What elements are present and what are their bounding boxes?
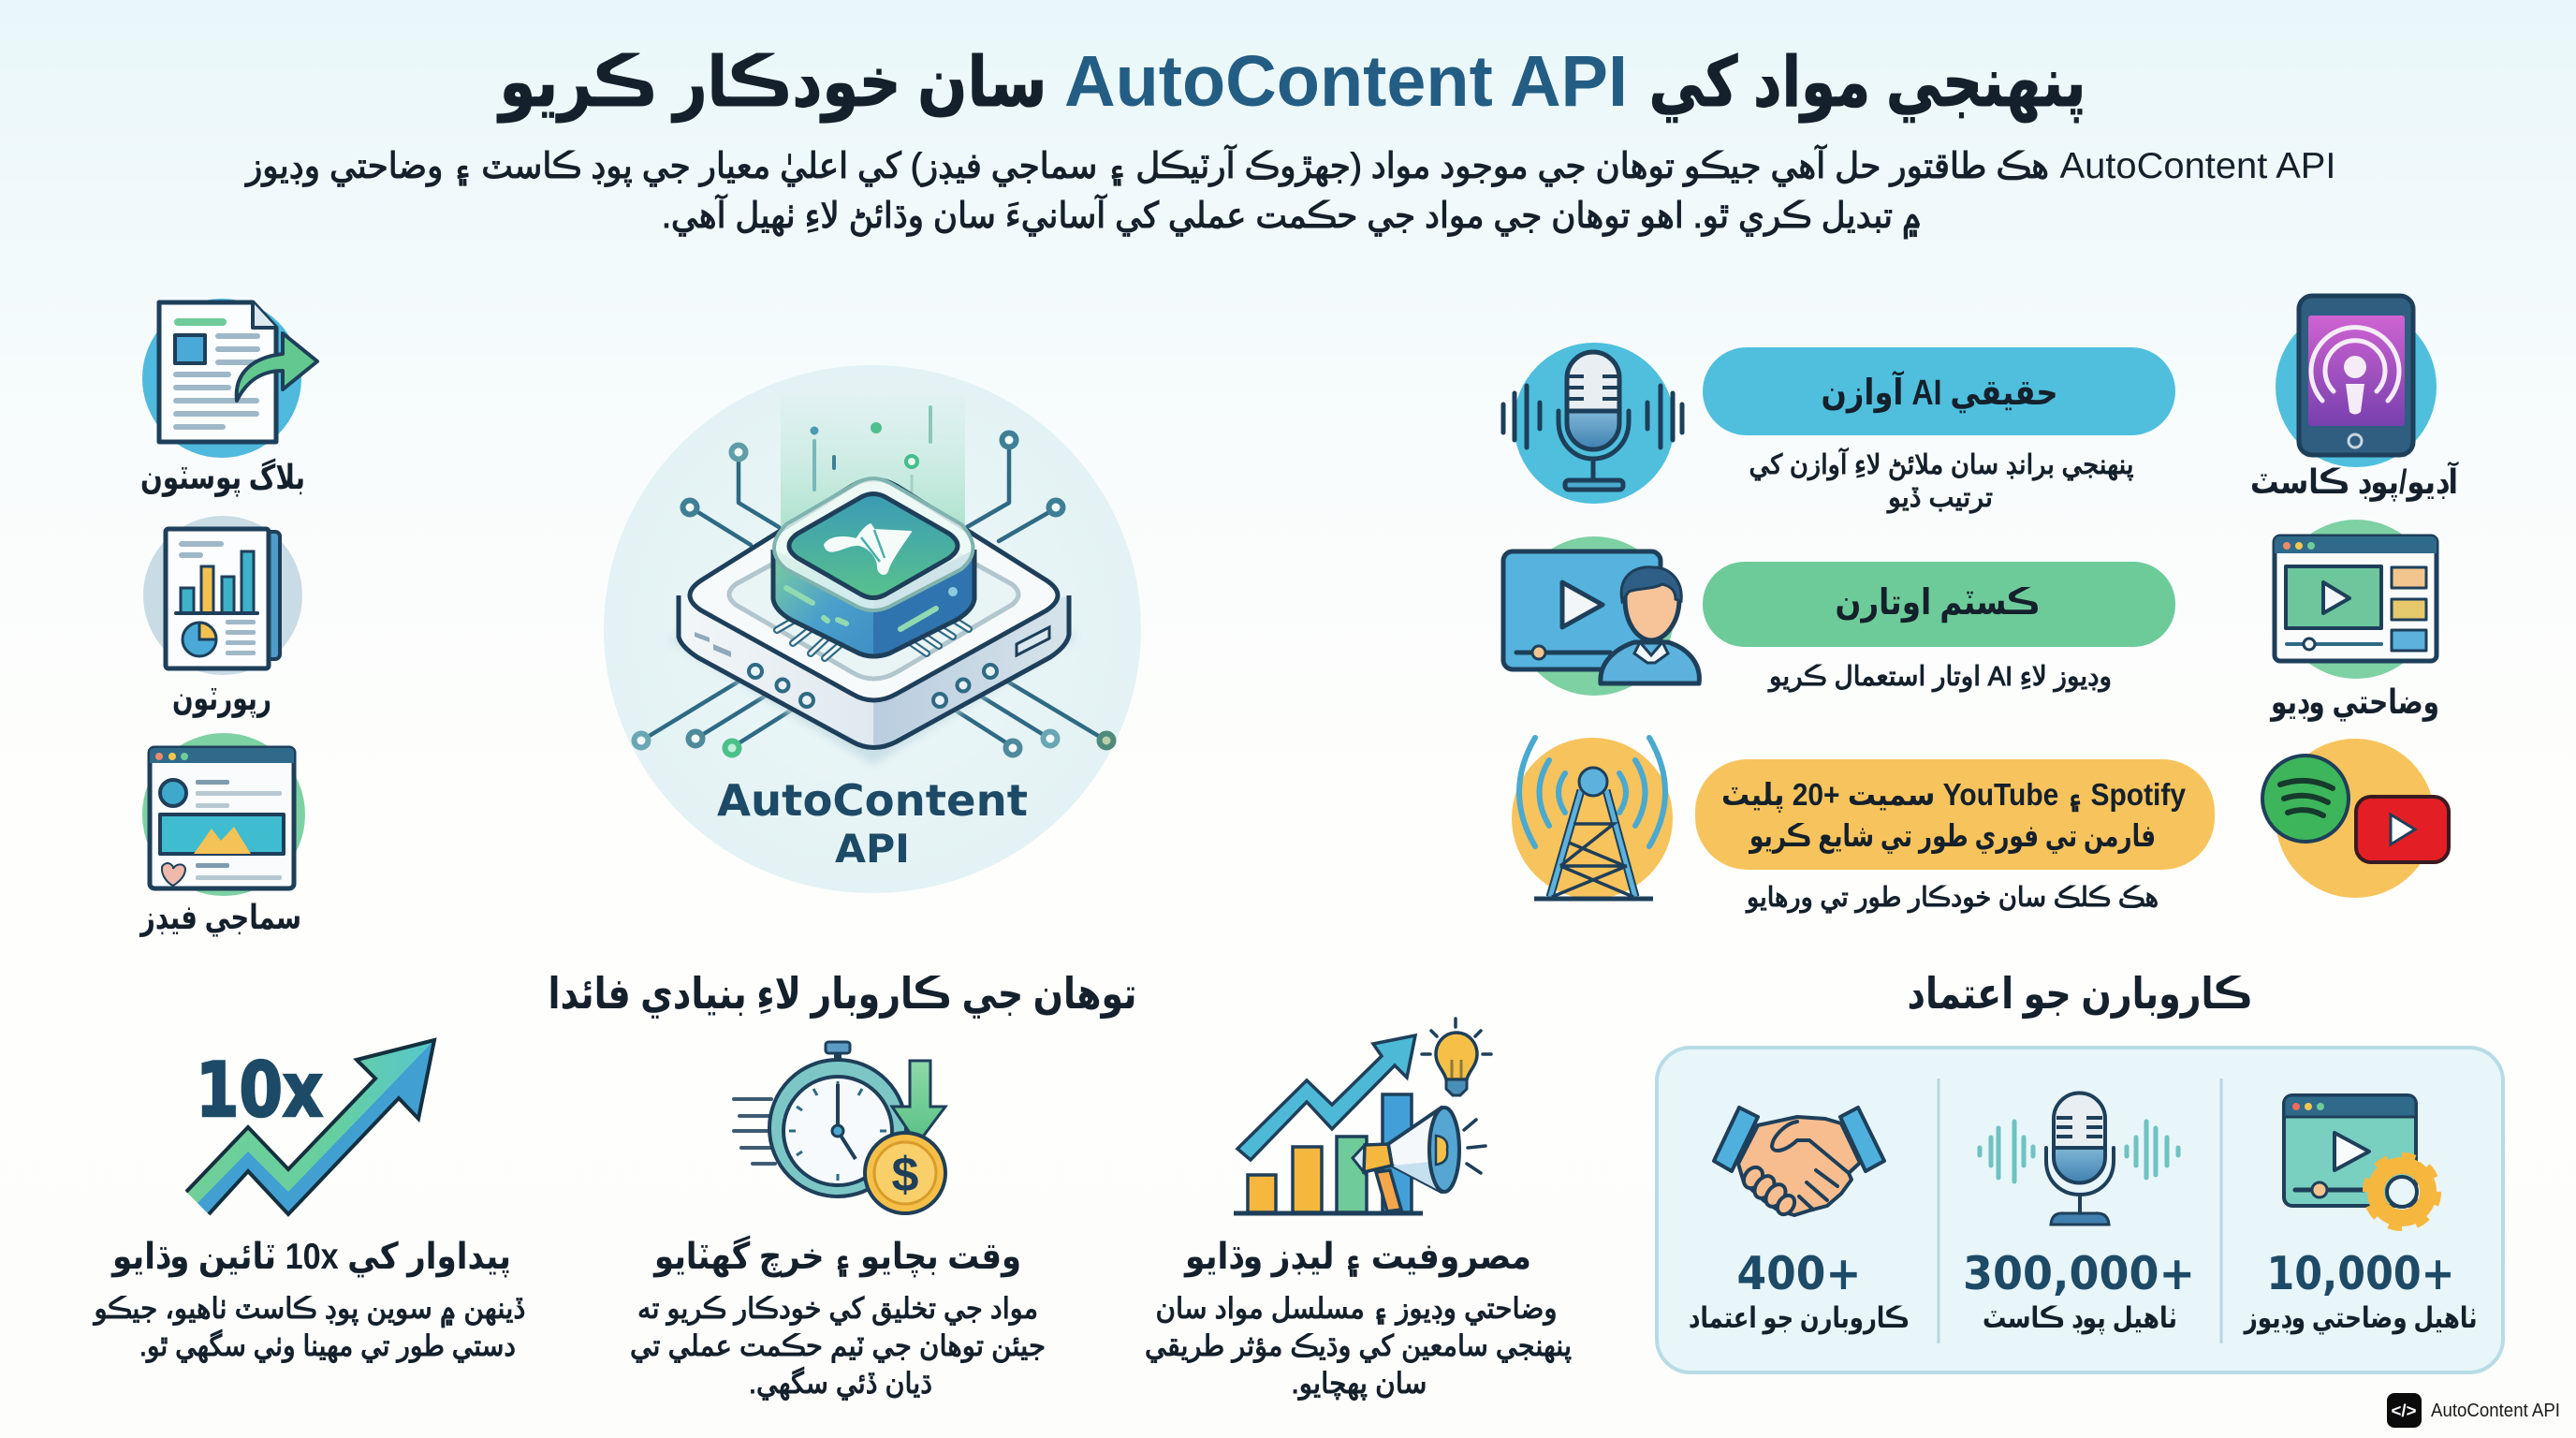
title: AutoContent API: [1064, 41, 1628, 122]
icon: microphone in blue circle: [1503, 343, 1682, 504]
benefit description: [93, 1292, 526, 1363]
text: voices description: پنهنجي برانڊ سان ملائڻ لاءِ آوازن کي: [1749, 448, 2134, 481]
benefit heading: وقت بچايو ۽ خرچ گهٽايو: [652, 1235, 1021, 1278]
brand badge: </>: [2391, 1401, 2417, 1420]
panel: benefit save time: [630, 1042, 1046, 1401]
panel: features: [1503, 343, 2215, 914]
light beam: [781, 396, 965, 532]
panel: outputs: [2250, 296, 2459, 898]
icon: explainer video: [2275, 520, 2437, 679]
pill: realistic AI voices: حقيقي AI آوازن: [1822, 370, 2057, 414]
stat labels: ٺاهيل پوڊ ڪاسٽ: [1983, 1301, 2177, 1335]
benefit heading: پيداوار کي 10x ٽائين وڌايو: [110, 1237, 511, 1278]
panel: central API hub: [604, 365, 1141, 893]
label: explainer video: وضاحتي وڊيو: [2269, 682, 2439, 722]
title: [496, 41, 2086, 124]
benefit heading: مصروفيت ۽ ليڊز وڌايو: [1183, 1237, 1531, 1278]
stat numbers: 400+: [1737, 1247, 1861, 1300]
pill: custom avatars: [1703, 562, 2175, 647]
icon: video with gear: [2284, 1095, 2437, 1226]
stat labels: ٺاهيل وضاحتي وڊيوز: [2243, 1301, 2477, 1335]
text: avatars description: وڊيوز لاءِ AI اوتار استعمال ڪريو: [1767, 662, 2112, 692]
label: audio podcast: آڊيو/پوڊ ڪاسٽ: [2250, 461, 2459, 502]
benefit description: مواد جي تخليق کي خودڪار ڪريو ته: [637, 1292, 1038, 1326]
benefit description: پنهنجي سامعين کي وڌيڪ مؤثر طريقي: [1145, 1329, 1572, 1363]
subtitle: [244, 144, 2335, 239]
stat labels: [1689, 1301, 2477, 1335]
benefit description: جيئن توهان جي ٽيم حڪمت عملي تي: [630, 1329, 1046, 1363]
connector nodes: [635, 433, 1114, 755]
icon: 10x growth arrow: [186, 1040, 434, 1214]
subtitle: ۾ تبديل ڪري ٿو. اهو توهان جي مواد جي حڪمت عملي کي آسانيءَ سان وڌائڻ لاءِ ٺهيل آهي.: [662, 194, 1922, 239]
icon: blog posts: [142, 299, 317, 458]
label: blog posts: بلاگ پوسٽون: [140, 457, 305, 497]
benefit description: سان پهچايو.: [1292, 1367, 1427, 1401]
stat labels: ڪاروبارن جو اعتماد: [1689, 1301, 1910, 1335]
benefit description: وضاحتي وڊيوز ۽ مسلسل مواد سان: [1155, 1292, 1558, 1326]
panel: input sources: [139, 299, 317, 937]
pill: custom avatars: ڪسٽم اوتارن: [1835, 583, 2041, 624]
benefit description: ڏينهن ۾ سوين پوڊ ڪاسٽ ٺاهيو، جيڪو: [93, 1292, 526, 1328]
icon: bars megaphone and bulb: [1234, 1019, 1491, 1213]
benefit description: [630, 1292, 1046, 1401]
icon: video with avatar: [1503, 536, 1699, 696]
icon: 10x growth arrow: 10x: [196, 1047, 323, 1134]
particles: [811, 407, 930, 496]
icon: social feeds: [142, 733, 305, 896]
panel: benefit engagement: [1145, 1019, 1572, 1401]
title: سان خودڪار ڪريو: [496, 43, 1046, 124]
icon: podcast app: [2276, 296, 2437, 467]
chip logo: [825, 524, 911, 574]
hub label: API: [835, 826, 910, 872]
stat numbers: 300,000+: [1963, 1247, 2195, 1300]
text: voices description: ترتيب ڏيو: [1886, 483, 1993, 513]
hub label: AutoContent: [717, 775, 1028, 826]
icon: stopwatch with coin: [734, 1042, 945, 1213]
heading: business trust: ڪاروبارن جو اعتماد: [1908, 969, 2252, 1019]
device base: [669, 479, 1078, 765]
icon: handshake: [1714, 1108, 1884, 1218]
subtitle: AutoContent API: [2059, 146, 2336, 186]
panel: trust stats: [1657, 1048, 2503, 1372]
pill: publishing: Spotify ۽ YouTube سميت +20 پليٽ: [1721, 777, 2187, 813]
pill: publishing: فارمن تي فوري طور تي شايع ڪريو: [1749, 818, 2156, 855]
pill: realistic AI voices: [1703, 347, 2175, 435]
pill: publishing: [1695, 759, 2215, 870]
stat numbers: 10,000+: [2267, 1247, 2454, 1300]
subtitle: هڪ طاقتور حل آهي جيڪو توهان جي موجود مواد (جهڙوڪ آرٽيڪل ۽ سماجي فيڊز) کي اعليٰ معيار جي پوڊ ڪاسٽ ۽ وضاحتي وڊيوز: [244, 144, 2049, 187]
icon: microphone: [1980, 1093, 2178, 1225]
title: پنهنجي مواد کي: [1649, 43, 2086, 124]
panel: benefit 10x output: [93, 1040, 526, 1363]
icon: reports: [143, 516, 302, 675]
connector lines: [648, 448, 1100, 743]
heading: business benefits: توهان جي ڪاروبار لاءِ بنيادي فائدا: [549, 969, 1136, 1019]
text: publishing description: هڪ ڪلڪ سان خودڪار طور تي ورهايو: [1745, 883, 2159, 914]
brand badge: AutoContent API: [2431, 1401, 2560, 1421]
hub label: [717, 775, 1028, 872]
text: voices description: [1749, 448, 2134, 513]
stat numbers: [1737, 1247, 2454, 1300]
benefit description: دستي طور تي مهينا وٺي سگهي ٿو.: [139, 1329, 516, 1363]
brand badge: [2387, 1393, 2560, 1428]
label: reports: رپورٽون: [172, 679, 271, 718]
chip: [773, 478, 974, 657]
benefit description: ڌيان ڏئي سگهي.: [749, 1367, 932, 1401]
benefit description: [1145, 1292, 1572, 1401]
icon: broadcast tower: [1512, 738, 1673, 899]
label: social feeds: سماجي فيڊز: [139, 898, 301, 937]
icon: stopwatch with coin: $: [892, 1148, 919, 1202]
icon: spotify and youtube: [2262, 739, 2449, 898]
